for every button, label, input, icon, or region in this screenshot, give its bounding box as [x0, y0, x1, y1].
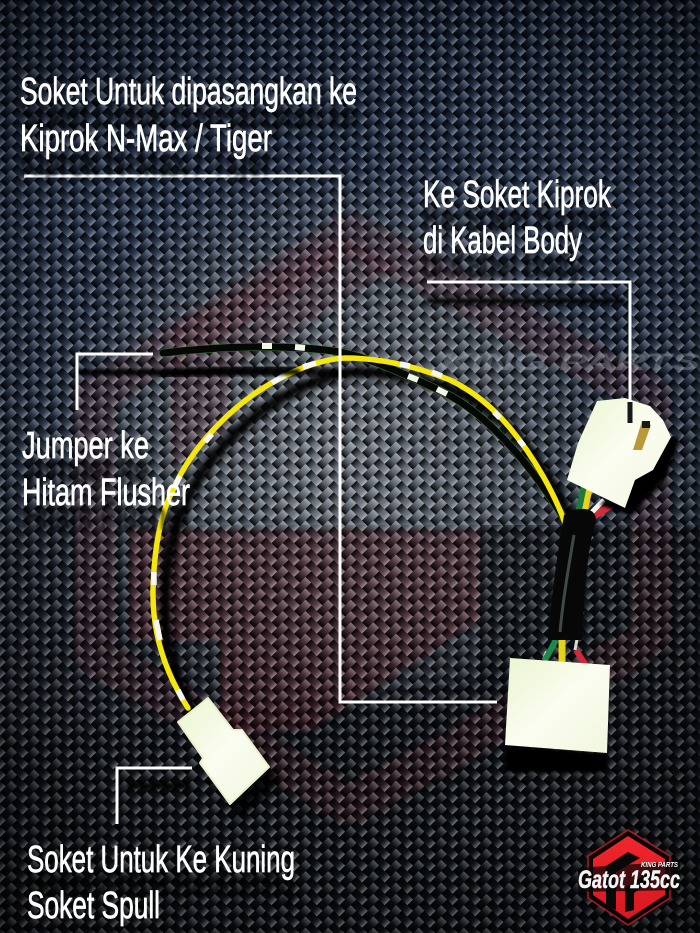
label: Ke Soket Kiprok di Kabel Body: di Kabel Body [423, 244, 582, 286]
line: Jumper pointer [77, 354, 153, 410]
label: Soket Untuk Ke Kuning Soket Spull [27, 839, 295, 927]
logo: Gatot 135cc King Parts [578, 830, 680, 925]
label: Jumper ke Hitam Flusher: Jumper ke [22, 425, 149, 467]
connector: bottom right socket [505, 658, 610, 772]
label: Soket Untuk dipasangkan ke Kiprok N-Max / Tiger [20, 71, 357, 184]
label: Jumper ke Hitam Flusher: Hitam Flusher [22, 496, 190, 538]
yellow white-striped wire [153, 358, 565, 708]
label: Soket Untuk Ke Kuning Soket Spull: Soket Untuk Ke Kuning [27, 839, 295, 881]
label: Jumper ke Hitam Flusher: Hitam Flusher [22, 472, 190, 514]
heat-shrink sleeve and wires [545, 483, 612, 664]
label: Ke Soket Kiprok di Kabel Body: di Kabel Body [423, 220, 582, 262]
label: Ke Soket Kiprok di Kabel Body: Ke Soket Kiprok [423, 198, 612, 240]
label: Soket Untuk dipasangkan ke Kiprok N-Max / Tiger: Soket Untuk dipasangkan ke [20, 71, 357, 113]
wire harness [153, 346, 577, 722]
logo: Gatot 135cc King Parts: KING PARTS [641, 862, 678, 869]
line: N-Max socket pointer [24, 176, 497, 702]
label: Ke Soket Kiprok di Kabel Body [423, 174, 612, 286]
label: Soket Untuk Ke Kuning Soket Spull: Soket Spull [27, 885, 160, 927]
black jumper wire [163, 346, 568, 525]
connector: top right socket [567, 398, 680, 516]
carbon fibre background: KING PARTS [440, 349, 700, 376]
label: Ke Soket Kiprok di Kabel Body: Ke Soket Kiprok [423, 174, 612, 216]
label: Soket Untuk dipasangkan ke Kiprok N-Max / Tiger: Kiprok N-Max / Tiger [20, 142, 272, 184]
label: Jumper ke Hitam Flusher: Jumper ke [22, 449, 149, 491]
label: Soket Untuk dipasangkan ke Kiprok N-Max / Tiger: Kiprok N-Max / Tiger [20, 118, 272, 160]
label: Jumper ke Hitam Flusher [22, 425, 190, 538]
connector: bottom left socket [178, 698, 282, 820]
pointer lines [24, 176, 630, 824]
line: Kabel Body pointer [427, 282, 630, 402]
line: Spull socket pointer [117, 768, 192, 824]
label: Soket Untuk Ke Kuning Soket Spull: Soket Untuk Ke Kuning [27, 863, 295, 905]
label: Soket Untuk dipasangkan ke Kiprok N-Max / Tiger: Soket Untuk dipasangkan ke [20, 95, 357, 137]
